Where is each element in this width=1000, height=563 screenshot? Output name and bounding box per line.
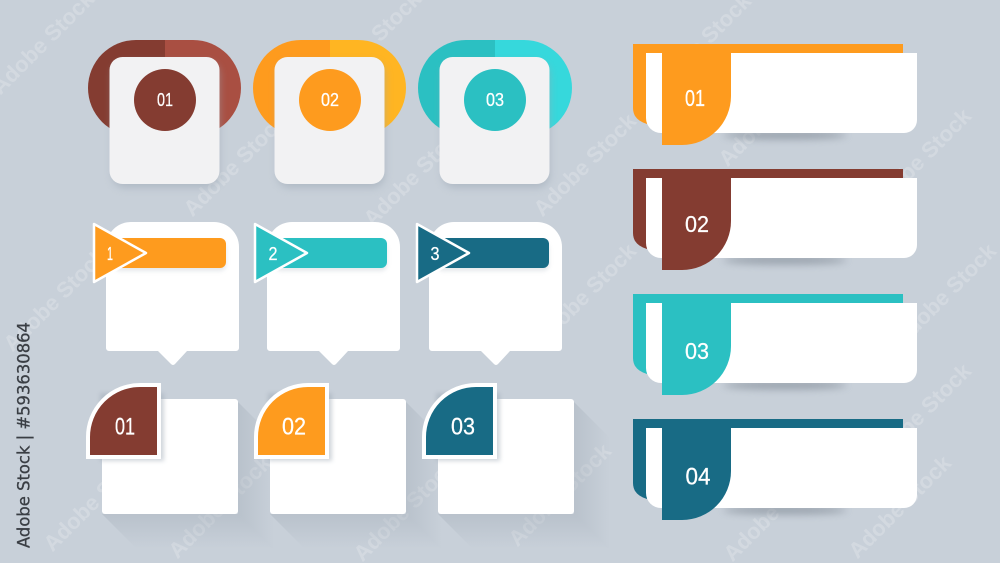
watermark: Adobe Stock bbox=[863, 358, 977, 471]
long shadow 01 bbox=[102, 402, 276, 552]
white card 01 bbox=[646, 53, 917, 133]
square card 02 bbox=[270, 399, 406, 514]
back strip 04 bbox=[633, 419, 903, 499]
watermark: Adobe Stock bbox=[863, 103, 977, 216]
back strip 02 bbox=[633, 169, 903, 249]
card 03 bbox=[440, 57, 550, 188]
banner shadow 03 bbox=[723, 381, 847, 389]
square card 01 bbox=[102, 399, 238, 514]
back pill 01 bbox=[88, 40, 241, 136]
corner badge 02 bbox=[256, 385, 327, 457]
corner badge 03: 03 bbox=[451, 414, 475, 440]
watermark: Adobe Stock bbox=[0, 243, 112, 356]
panel: banner 04 bbox=[633, 419, 917, 520]
panel: speech card 2 bbox=[255, 222, 400, 365]
card 02 bbox=[274, 57, 385, 188]
badge shadow 02 bbox=[268, 393, 332, 461]
watermark: Adobe Stock bbox=[178, 108, 292, 221]
speech bubble 3 bbox=[429, 222, 562, 365]
white card 02 bbox=[646, 178, 917, 258]
speech bubble 2 bbox=[267, 222, 400, 365]
white card 04 bbox=[646, 428, 917, 508]
arrow badge 3: 3 bbox=[430, 244, 440, 264]
corner badge 03 bbox=[424, 385, 495, 457]
arrow badge 2: 2 bbox=[268, 244, 278, 264]
watermark: Adobe Stock bbox=[528, 108, 642, 221]
watermark: Adobe Stock bbox=[163, 450, 277, 563]
back strip 01 bbox=[633, 44, 903, 124]
watermark: Adobe Stock bbox=[348, 453, 462, 563]
corner badge 01 bbox=[88, 385, 159, 457]
watermark: Adobe Stock bbox=[528, 238, 642, 351]
watermark: Adobe Stock bbox=[843, 450, 957, 563]
arrow badge 1 bbox=[94, 224, 146, 282]
panel: top card 03 bbox=[418, 40, 572, 188]
card 01 bbox=[110, 57, 220, 188]
long shadow 02 bbox=[270, 402, 444, 552]
number tab 04 bbox=[662, 419, 731, 520]
header bar 2 bbox=[273, 238, 387, 271]
number circle 02: 02 bbox=[321, 90, 339, 110]
speech bubble 1 bbox=[106, 222, 239, 365]
watermark: Adobe Stock bbox=[358, 118, 472, 231]
panel: banner 01 bbox=[633, 44, 917, 145]
number tab 02 bbox=[662, 169, 731, 270]
back pill 03 bbox=[418, 40, 572, 136]
arrow badge 1: 1 bbox=[107, 244, 113, 264]
watermark: Adobe Stock bbox=[38, 443, 152, 556]
number tab 01 bbox=[662, 44, 731, 145]
arrow badge 3 bbox=[417, 224, 469, 282]
back pill 02 bbox=[253, 40, 406, 136]
vertical stock credit: Adobe Stock | #593630864 bbox=[14, 322, 34, 548]
banner shadow 01 bbox=[723, 131, 847, 139]
panel: corner card 02 bbox=[256, 385, 444, 552]
panel: speech card 3 bbox=[417, 222, 562, 365]
number tab 04: 04 bbox=[686, 464, 710, 490]
number circle 03 bbox=[464, 69, 526, 131]
long shadow 03 bbox=[438, 402, 612, 552]
panel: corner card 01 bbox=[88, 385, 276, 552]
header bar 3 bbox=[435, 238, 549, 271]
corner badge 01: 01 bbox=[115, 414, 135, 440]
panel: banner 03 bbox=[633, 294, 917, 395]
number circle 01 bbox=[134, 69, 196, 131]
header bar 1 bbox=[112, 238, 226, 271]
number tab 03 bbox=[662, 294, 731, 395]
number circle 03: 03 bbox=[486, 90, 504, 110]
number tab 03: 03 bbox=[685, 338, 709, 364]
number circle 02 bbox=[299, 69, 361, 131]
panel: banner 02 bbox=[633, 169, 917, 270]
panel: corner card 03 bbox=[424, 385, 612, 552]
panel: top card 02 bbox=[253, 40, 406, 188]
banner shadow 02 bbox=[723, 256, 847, 264]
square card 03 bbox=[438, 399, 574, 514]
arrow badge 2 bbox=[255, 224, 307, 282]
watermark: Adobe Stock bbox=[503, 438, 617, 551]
back strip 03 bbox=[633, 294, 903, 374]
watermark: Adobe Stock bbox=[888, 238, 1000, 351]
banner shadow 04 bbox=[723, 506, 847, 514]
number tab 02: 02 bbox=[685, 211, 709, 237]
badge shadow 01 bbox=[100, 393, 164, 461]
number circle 01: 01 bbox=[157, 90, 173, 110]
corner badge 02: 02 bbox=[282, 414, 306, 440]
panel: speech card 1 bbox=[94, 222, 239, 365]
panel: top card 01 bbox=[88, 40, 241, 188]
number tab 01: 01 bbox=[685, 85, 705, 111]
watermark: Adobe Stock bbox=[718, 453, 832, 563]
badge shadow 03 bbox=[436, 393, 500, 461]
watermark: Adobe Stock bbox=[713, 58, 827, 171]
white card 03 bbox=[646, 303, 917, 383]
